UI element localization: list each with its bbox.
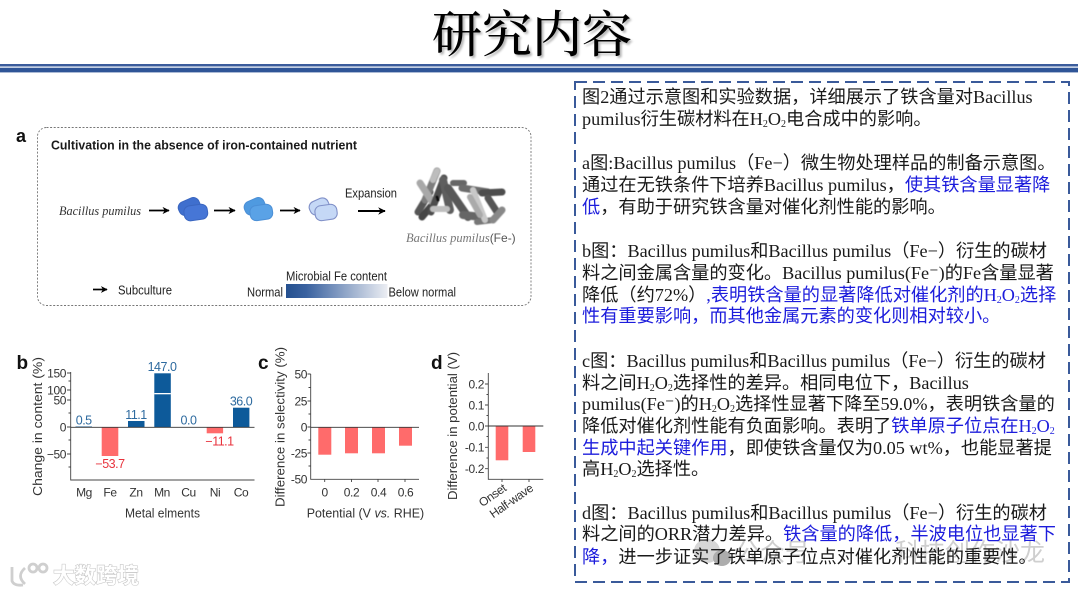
text block: d: d图：Bacillus pumilus和Bacillus pumilus（Fe−）衍生的碳材: [582, 503, 1047, 523]
text frame: [574, 81, 1070, 583]
text block: c: pumilus(Fe⁻)的H2O2选择性显著下降至59.0%，表明铁含量的: [582, 394, 1055, 415]
y tick labels: 0.1: [469, 398, 485, 412]
panel c letter: c: [258, 353, 269, 374]
x tick labels: Half-wave: [487, 481, 536, 521]
y tick labels: −50: [47, 448, 67, 462]
zero line: [71, 426, 254, 428]
value labels: −11.1: [205, 434, 234, 448]
x tick labels: Cu: [181, 486, 196, 500]
value labels: 0.5: [76, 414, 92, 428]
text block: a: [582, 153, 1056, 217]
arrow: expansion: [358, 210, 385, 212]
watermark text: 大数跨境: [53, 564, 139, 588]
figure panels: [10, 126, 544, 588]
y tick labels: -0.1: [465, 440, 485, 454]
bars: [76, 373, 249, 456]
y tick labels: -25: [291, 446, 308, 460]
y tick labels: 50: [53, 394, 67, 408]
value labels: −53.7: [95, 457, 125, 471]
panel b: metal content chart: [16, 353, 254, 520]
y tick labels: [291, 368, 308, 486]
watermark: right side: 公众号: [735, 539, 810, 567]
arrow: to third culture: [280, 210, 300, 212]
panel d: potential chart: [431, 352, 543, 521]
x tick labels: 0.4: [371, 486, 387, 500]
text block: d: 降，进一步证实了铁单原子位点对催化剂性能的重要性。: [582, 547, 1037, 567]
y tick labels: [465, 378, 485, 476]
bars: [496, 426, 535, 460]
y tick labels: [47, 366, 67, 462]
text block: c: c图：Bacillus pumilus和Bacillus pumilus（Fe−）衍生的碳材: [582, 351, 1046, 371]
x tick labels: Mn: [154, 486, 170, 500]
y tick labels: -0.2: [465, 462, 485, 476]
text block: c: 降低对催化剂性能有负面影响。表明了铁单原子位点在H2O2: [582, 416, 1055, 437]
arrow: to second culture: [214, 210, 235, 212]
arrow: to first culture: [149, 210, 169, 212]
panel a dashed frame: [38, 128, 531, 306]
x axis title: Metal elments: [125, 506, 200, 520]
title: 研究内容: [432, 7, 632, 63]
label: Bacillus pumilus (Fe-): Bacillus pumilus(Fe-): [406, 231, 516, 245]
watermark: 大数跨境: [12, 564, 139, 588]
y tick labels: 25: [294, 394, 308, 408]
legend: subculture: [93, 284, 172, 298]
text block: b: 降低（约72%）,表明铁含量的显著降低对催化剂的H2O2选择: [582, 284, 1056, 306]
zero line: [311, 426, 419, 428]
y axis title: Change in content (%): [30, 357, 45, 496]
text block: b: 料之间金属含量的变化。Bacillus pumilus(Fe⁻)的Fe含量显著: [582, 263, 1054, 283]
x axis title: Potential (V vs. RHE): [307, 506, 424, 520]
legend: microbial Fe content: Below normal: [388, 286, 456, 300]
x tick labels: Zn: [129, 486, 143, 500]
value labels: 147.0: [148, 360, 177, 374]
zero line: [488, 425, 543, 427]
y tick labels: 0.0: [469, 420, 485, 434]
x tick labels: Onset: [476, 480, 510, 510]
x tick labels: Co: [234, 486, 249, 500]
label: Bacillus pumilus: Bacillus pumilus: [59, 203, 141, 218]
panel: explanatory text: [574, 81, 1070, 583]
text block: c: [582, 351, 1055, 480]
x tick labels: [322, 486, 414, 500]
legend: microbial Fe content: [247, 270, 456, 300]
text block: intro: [582, 87, 1033, 130]
icon: medium iron cells: [242, 196, 274, 221]
value labels: 36.0: [230, 394, 253, 408]
x tick labels: Mg: [76, 486, 92, 500]
legend: microbial Fe content: Microbial Fe content: [286, 270, 387, 284]
text block: d: 料之间的ORR潜力差异。铁含量的降低，半波电位也显著下: [582, 524, 1056, 544]
text block: intro: 图2通过示意图和实验数据，详细展示了铁含量对Bacillus: [582, 87, 1033, 107]
x tick labels: 0: [322, 486, 329, 500]
y tick labels: 100: [47, 384, 67, 398]
y tick labels: 50: [294, 368, 308, 382]
text block: a: 通过在无铁条件下培养Bacillus pumilus，使其铁含量显著降: [582, 175, 1050, 195]
watermark: right side: [694, 539, 1045, 567]
header rule: [0, 64, 1078, 72]
text block: b: [582, 241, 1056, 326]
legend: subculture: Subculture: [118, 284, 172, 298]
text block: intro: pumilus衍生碳材料在H2O2电合成中的影响。: [582, 109, 932, 130]
y tick labels: 0.2: [469, 378, 485, 392]
y tick labels: 150: [47, 366, 67, 380]
x tick labels: Ni: [210, 486, 220, 500]
y axis title: Difference in selectivity (%): [274, 347, 288, 507]
text block: d: [582, 503, 1056, 567]
bars: [318, 427, 412, 455]
axes: [308, 374, 419, 482]
text block: b: b图：Bacillus pumilus和Bacillus pumilus（Fe−）衍生的碳材: [582, 241, 1047, 261]
panel c: selectivity chart: [258, 347, 424, 520]
axes: [485, 373, 543, 482]
panel b letter: b: [16, 353, 28, 374]
icon: normal iron cells: [176, 196, 209, 222]
y tick labels: 0: [60, 420, 67, 434]
text block: c: 生成中起关键作用，即使铁含量仅为0.05 wt%，也能显著提: [582, 438, 1052, 458]
panel d letter: d: [431, 353, 443, 374]
text block: c: 高H2O2选择性。: [582, 459, 709, 480]
text block: b: 性有重要影响，而其他金属元素的变化则相对较小。: [582, 306, 1000, 326]
y tick labels: 0: [301, 420, 308, 434]
value labels: 0.0: [181, 414, 197, 428]
image: bacteria micrograph: [418, 171, 502, 222]
y tick labels: -50: [291, 472, 308, 486]
x tick labels: Fe: [103, 486, 117, 500]
value labels: 11.1: [125, 408, 147, 422]
x tick labels: [76, 486, 249, 500]
x tick labels: 0.2: [344, 486, 360, 500]
icon: low iron cells: [307, 196, 338, 221]
text block: c: 料之间H2O2选择性的差异。相同电位下，Bacillus: [582, 373, 969, 394]
axes: [67, 372, 254, 480]
text block: a: 低，有助于研究铁含量对催化剂性能的影响。: [582, 197, 946, 217]
panel a heading: Cultivation in the absence of iron-contained nutrient: [51, 138, 358, 152]
panel a: cultivation schematic: [16, 126, 531, 306]
value labels: [76, 360, 253, 471]
watermark logo: [12, 564, 47, 585]
y axis title: Difference in potential (V): [446, 352, 460, 500]
panel a letter: a: [16, 126, 27, 146]
watermark: right side: 科技创作沙龙: [895, 539, 1045, 567]
text block: a: a图:Bacillus pumilus（Fe−）微生物处理样品的制备示意图。: [582, 153, 1056, 173]
x tick labels: 0.6: [398, 486, 414, 500]
label: Expansion: Expansion: [345, 186, 397, 200]
legend: microbial Fe content: Normal: [247, 286, 283, 300]
